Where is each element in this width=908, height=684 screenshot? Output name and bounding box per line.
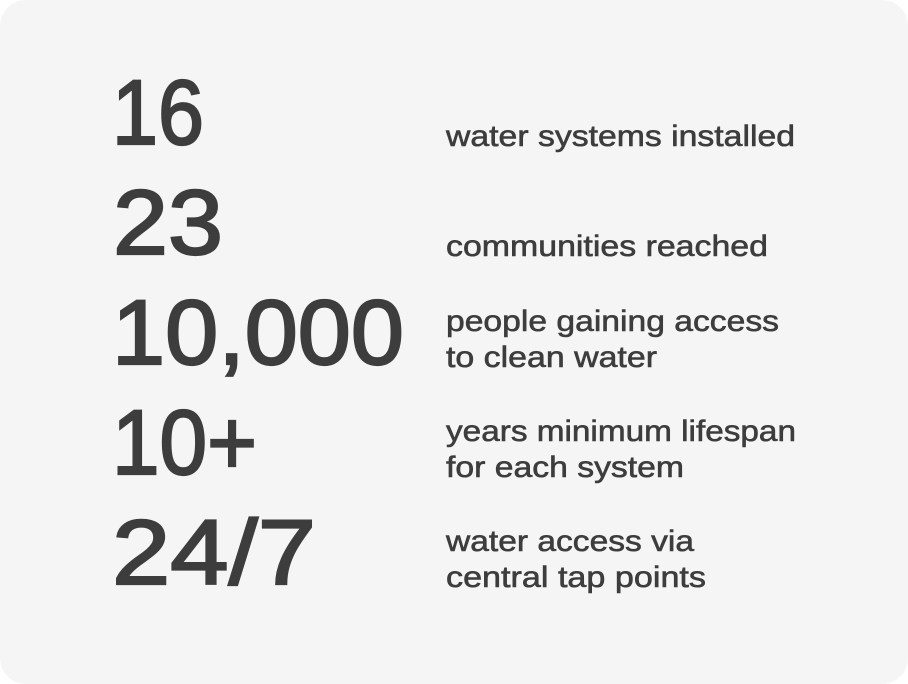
label: years minimum lifespan for each system: [446, 415, 796, 484]
label: people gaining access to clean water: to clean water: [446, 341, 657, 374]
label: years minimum lifespan for each system: for each system: [446, 451, 684, 484]
label: people gaining access to clean water: people gaining access: [446, 305, 779, 338]
label: people gaining access to clean water: [446, 305, 779, 374]
stat: 23 communities reached: [113, 172, 768, 274]
label: water systems installed: water systems installed: [445, 120, 795, 153]
number: 16: 16: [112, 62, 204, 164]
number: 24/7: 24/7: [112, 502, 316, 604]
stat: 16 water systems installed: [112, 62, 795, 164]
label: water access via central tap points: [445, 525, 706, 594]
stat: 10+ years minimum lifespan for each system: [112, 392, 796, 494]
label: communities reached: communities reached: [446, 230, 768, 263]
stat: 10,000 people gaining access to clean water: [112, 282, 779, 384]
number: 10+: 10+: [112, 392, 257, 494]
stat: 24/7 water access via central tap points: [112, 502, 706, 604]
label: water access via central tap points: water access via: [445, 525, 694, 558]
number: 10,000: 10,000: [112, 282, 404, 384]
label: years minimum lifespan for each system: years minimum lifespan: [446, 415, 796, 448]
label: water access via central tap points: central tap points: [446, 561, 706, 594]
number: 23: 23: [113, 172, 223, 274]
